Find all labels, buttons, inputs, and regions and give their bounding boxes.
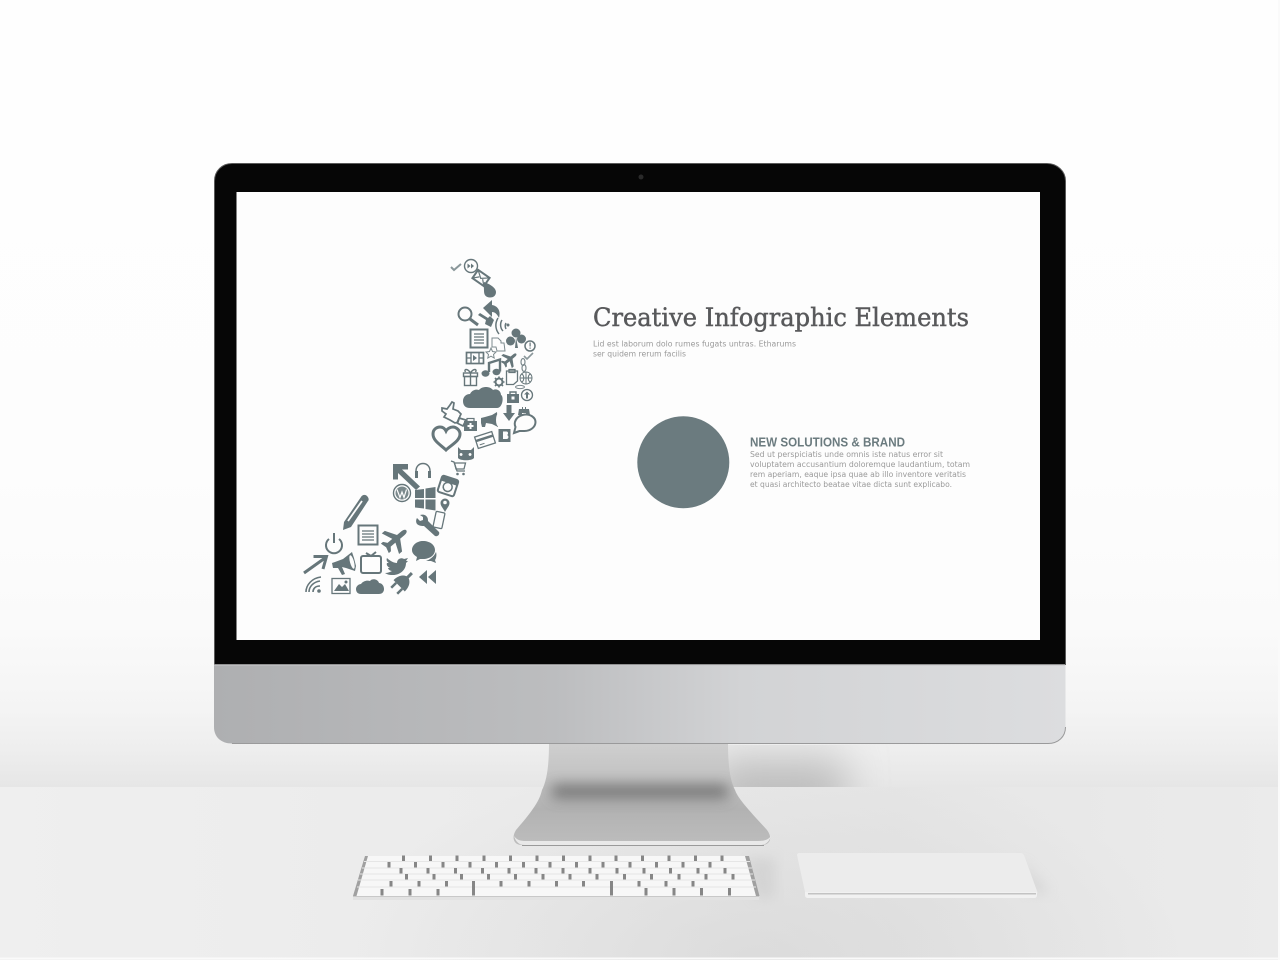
monitor	[214, 164, 1066, 744]
icon: headphones	[415, 464, 431, 478]
icon: star	[486, 348, 496, 358]
keyboard	[353, 856, 775, 900]
subtitle text: Lid est laborum dolo rumes fugats untras. Etharums	[593, 340, 796, 348]
stand shadow band	[552, 785, 728, 798]
icon: cloud large	[463, 387, 503, 408]
icon: up arrow circle	[522, 390, 532, 400]
keyboard shadow	[745, 858, 775, 898]
monitor bezel	[214, 164, 1066, 664]
icon: briefcase	[507, 392, 519, 403]
icon: pencil	[343, 495, 369, 530]
icon: octocat	[458, 447, 474, 460]
icon: club	[506, 328, 526, 348]
icon: map pin	[440, 498, 450, 512]
icon: medical case	[464, 418, 477, 431]
circle placeholder	[637, 416, 729, 508]
icon: television	[361, 552, 381, 573]
icon: magnifier	[458, 308, 478, 325]
icon: speech bubble	[514, 415, 536, 433]
icon: copy	[492, 338, 505, 351]
icon: wrench	[416, 515, 439, 536]
icon: airplane large	[376, 520, 415, 559]
icon: dot	[506, 324, 510, 326]
webcam	[638, 174, 644, 180]
icon: instagram camera	[437, 475, 459, 497]
body text: Sed ut perspiciatis unde omnis iste natus error sit	[750, 450, 943, 459]
icon: basketball	[520, 372, 532, 384]
icon: heart	[433, 427, 460, 450]
trackpad shadow	[1020, 860, 1050, 893]
icon: smartphone	[433, 511, 445, 529]
title: Creative Infographic Elements	[593, 303, 969, 332]
icon: twitter bird	[385, 558, 408, 575]
keyboard key ticks	[382, 856, 733, 896]
icon: chain	[516, 385, 524, 389]
icon: document	[470, 330, 488, 348]
icon: check small	[524, 353, 533, 359]
icon: power button	[326, 533, 342, 553]
body text: et quasi architecto beatae vitae dicta sunt explicabo.	[750, 480, 952, 489]
icon: music note	[482, 360, 500, 377]
monitor stand	[514, 743, 771, 846]
icon: cloud small	[356, 579, 384, 594]
background: desk	[0, 787, 1280, 960]
icon: check	[451, 264, 461, 270]
screen	[236, 192, 1040, 640]
icon cluster: boot shaped arrangement of icons	[304, 260, 536, 596]
trackpad surface	[797, 853, 1037, 894]
icon: wordpress	[394, 484, 410, 502]
icon: plug	[389, 567, 418, 596]
icon: windows logo	[415, 487, 436, 510]
icon: shopping cart	[451, 461, 466, 475]
icon: blog book	[498, 429, 510, 442]
keyboard body	[353, 856, 759, 900]
stand base lip	[514, 836, 771, 845]
icon: wifi signal	[496, 318, 506, 334]
icon: thumbs up	[442, 402, 466, 426]
subtitle text	[593, 340, 796, 358]
icon: arrow north-west	[393, 464, 420, 490]
icon: gear	[494, 376, 504, 388]
icon: rewind	[419, 570, 436, 584]
icon: document large	[358, 526, 378, 544]
monitor shadow on wall	[728, 745, 860, 787]
icon: arrow north-east	[304, 556, 326, 573]
icon: clipboard	[506, 370, 518, 384]
icon: credit card	[475, 432, 495, 448]
icon: envelope	[472, 270, 490, 286]
icon: drop	[484, 282, 496, 298]
trackpad	[797, 853, 1050, 898]
icon: forward circle	[464, 260, 478, 272]
icon: megaphone small	[332, 552, 356, 575]
icon: back arrow	[483, 300, 500, 318]
icon: down arrow	[503, 405, 515, 421]
body text: voluptatem accusantium doloremque laudantium, totam	[750, 460, 970, 469]
icon: image frame	[332, 578, 350, 594]
icon: airplane small	[498, 348, 521, 371]
subtitle text: ser quidem rerum facilis	[593, 350, 686, 358]
body text	[750, 450, 970, 489]
keyboard key gaps	[357, 862, 756, 887]
body text: rem aperiam, eaque ipsa quae ab illo inventore veritatis	[750, 470, 966, 479]
icon: info circle	[525, 341, 535, 351]
icon: link	[521, 358, 526, 372]
icon: wifi corner	[306, 577, 321, 592]
icon: chat bubbles	[412, 541, 436, 563]
icon: film strip	[466, 352, 484, 364]
icon: gift	[464, 370, 478, 386]
monitor chin	[214, 665, 1066, 744]
icon: megaphone	[481, 412, 500, 427]
icon: brush	[478, 313, 494, 327]
heading: new solutions and brand: NEW SOLUTIONS & BRAND	[750, 436, 905, 450]
icon: binoculars	[518, 407, 530, 415]
